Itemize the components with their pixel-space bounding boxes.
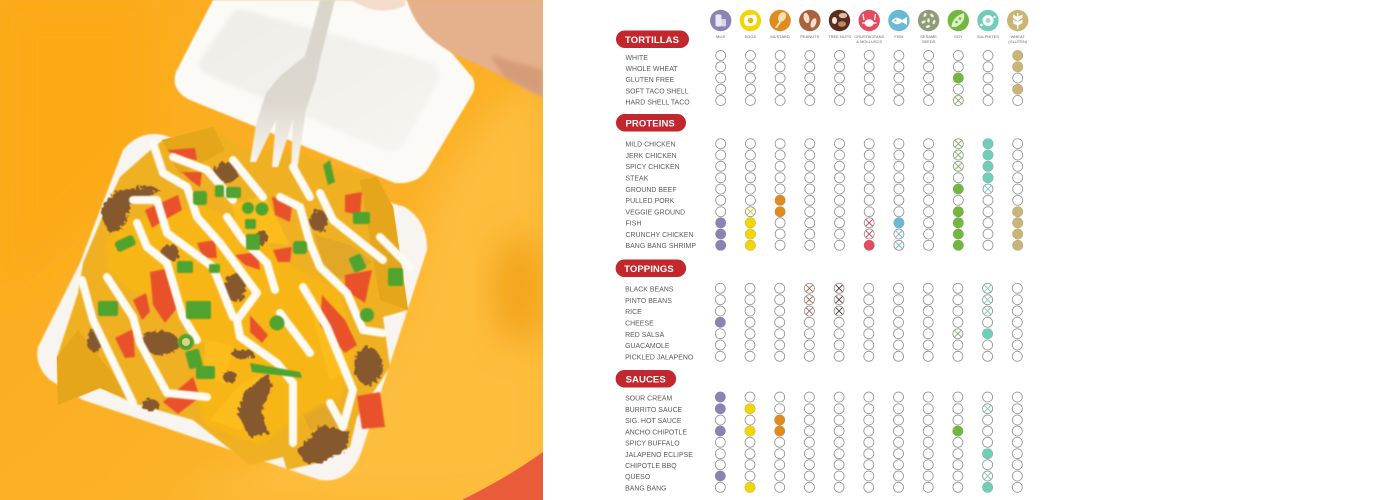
heading: tortillas: TORTILLAS bbox=[625, 35, 679, 46]
row labels: proteins: JERK CHICKEN bbox=[626, 153, 677, 160]
icon: tree nuts: TREE NUTS bbox=[828, 34, 851, 39]
box lid bbox=[175, 0, 474, 183]
heading: proteins: PROTEINS bbox=[626, 118, 675, 130]
sour cream drizzle bbox=[82, 143, 410, 443]
allergen icon header bbox=[710, 10, 1028, 44]
icon: sesame seeds bbox=[918, 10, 939, 44]
heading: sauces bbox=[616, 370, 676, 388]
row labels: sauces: CHIPOTLE BBQ bbox=[625, 463, 677, 470]
icon: peanuts: PEANUTS bbox=[800, 34, 820, 39]
heading: toppings: TOPPINGS bbox=[624, 264, 674, 275]
icon: crustaceans and molluscs: CRUSTACEANS bbox=[854, 34, 884, 39]
row labels: sauces: BURRITO SAUCE bbox=[625, 407, 683, 414]
row labels: proteins: STEAK bbox=[626, 176, 649, 182]
icon: sesame seeds: SEEDS bbox=[922, 39, 936, 44]
row labels: sauces bbox=[625, 396, 693, 492]
row labels: toppings: RICE bbox=[625, 309, 642, 316]
icon: eggs bbox=[740, 10, 761, 39]
icon: fish bbox=[888, 10, 910, 39]
row labels: toppings: PICKLED JALAPENO bbox=[625, 354, 694, 362]
red corner bbox=[462, 452, 543, 500]
panel: proteins bbox=[616, 114, 1023, 250]
nacho chips bbox=[57, 127, 408, 470]
row labels: toppings bbox=[625, 286, 694, 362]
icon: mustard: MUSTARD bbox=[770, 34, 790, 39]
icon: crustaceans and molluscs bbox=[854, 10, 884, 44]
icon: fish: FISH bbox=[894, 34, 904, 39]
row labels: toppings: GUACAMOLE bbox=[625, 343, 670, 350]
row labels: sauces: JALAPENO ECLIPSE bbox=[625, 452, 693, 459]
plastic fork bbox=[250, 0, 335, 170]
row labels: tortillas: SOFT TACO SHELL bbox=[626, 88, 689, 96]
icon: mustard bbox=[769, 10, 791, 39]
heading: toppings bbox=[616, 260, 686, 277]
tomato pieces bbox=[115, 148, 385, 429]
allergen grid: toppings bbox=[715, 283, 1022, 361]
icon: wheat: (GLUTEN) bbox=[1008, 39, 1028, 44]
icon: eggs: EGGS bbox=[745, 34, 757, 39]
icon: sesame seeds: SESAME bbox=[920, 34, 937, 39]
green onions bbox=[98, 160, 403, 379]
allergen grid: tortillas bbox=[716, 50, 1023, 106]
ground meat bbox=[87, 162, 382, 463]
row labels: sauces: BANG BANG bbox=[625, 486, 667, 492]
icon: soy: SOY bbox=[954, 34, 963, 39]
panel: sauces bbox=[616, 370, 1022, 492]
icon: sulphites: SULPHITES bbox=[977, 34, 999, 39]
allergen grid: proteins bbox=[716, 138, 1023, 250]
panel: tortillas bbox=[616, 30, 1023, 106]
panel: toppings bbox=[616, 260, 1022, 362]
row labels: sauces: ANCHO CHIPOTLE bbox=[625, 430, 687, 436]
row labels: proteins: PULLED PORK bbox=[626, 198, 675, 205]
hand bbox=[407, 0, 543, 97]
row labels: proteins: SPICY CHICKEN bbox=[626, 164, 680, 171]
icon: tree nuts bbox=[828, 10, 851, 39]
row labels: toppings: CHEESE bbox=[625, 320, 654, 328]
row labels: proteins: FISH bbox=[626, 220, 641, 228]
row labels: toppings: RED SALSA bbox=[625, 332, 665, 339]
heading: proteins bbox=[616, 114, 686, 132]
row labels: sauces: SOUR CREAM bbox=[625, 396, 673, 402]
row labels: tortillas: HARD SHELL TACO bbox=[626, 100, 690, 106]
row labels: proteins: CRUNCHY CHICKEN bbox=[626, 232, 694, 239]
row labels: tortillas: WHOLE WHEAT bbox=[626, 66, 678, 73]
row labels: toppings: BLACK BEANS bbox=[625, 286, 674, 294]
row labels: tortillas bbox=[626, 55, 690, 106]
row labels: proteins: BANG BANG SHRIMP bbox=[626, 243, 696, 250]
icon: milk: MILK bbox=[716, 34, 726, 39]
row labels: tortillas: GLUTEN FREE bbox=[626, 77, 675, 84]
food photo: nachos in a takeout box bbox=[0, 0, 548, 500]
row labels: proteins bbox=[626, 142, 696, 250]
allergen grid: sauces bbox=[715, 392, 1022, 492]
icon: soy bbox=[948, 10, 969, 39]
icon: wheat: WHEAT bbox=[1011, 34, 1025, 39]
icon: peanuts bbox=[799, 10, 820, 39]
row labels: tortillas: WHITE bbox=[626, 55, 648, 62]
icon: crustaceans and molluscs: & MOLLUSCS bbox=[856, 39, 882, 44]
row labels: sauces: SPICY BUFFALO bbox=[625, 440, 680, 448]
row labels: sauces: SIG. HOT SAUCE bbox=[625, 418, 682, 425]
row labels: proteins: GROUND BEEF bbox=[626, 187, 677, 194]
row labels: toppings: PINTO BEANS bbox=[625, 298, 672, 305]
heading: tortillas bbox=[616, 30, 689, 48]
row labels: proteins: MILD CHICKEN bbox=[626, 142, 676, 148]
cheese bbox=[105, 205, 355, 445]
icon: sulphites bbox=[977, 10, 999, 39]
icon: milk bbox=[710, 10, 731, 39]
icon: wheat bbox=[1007, 10, 1028, 44]
heading: sauces: SAUCES bbox=[626, 374, 666, 386]
row labels: proteins: VEGGIE GROUND bbox=[626, 210, 685, 216]
takeout tray bbox=[37, 134, 427, 480]
row labels: sauces: QUESO bbox=[625, 474, 651, 481]
